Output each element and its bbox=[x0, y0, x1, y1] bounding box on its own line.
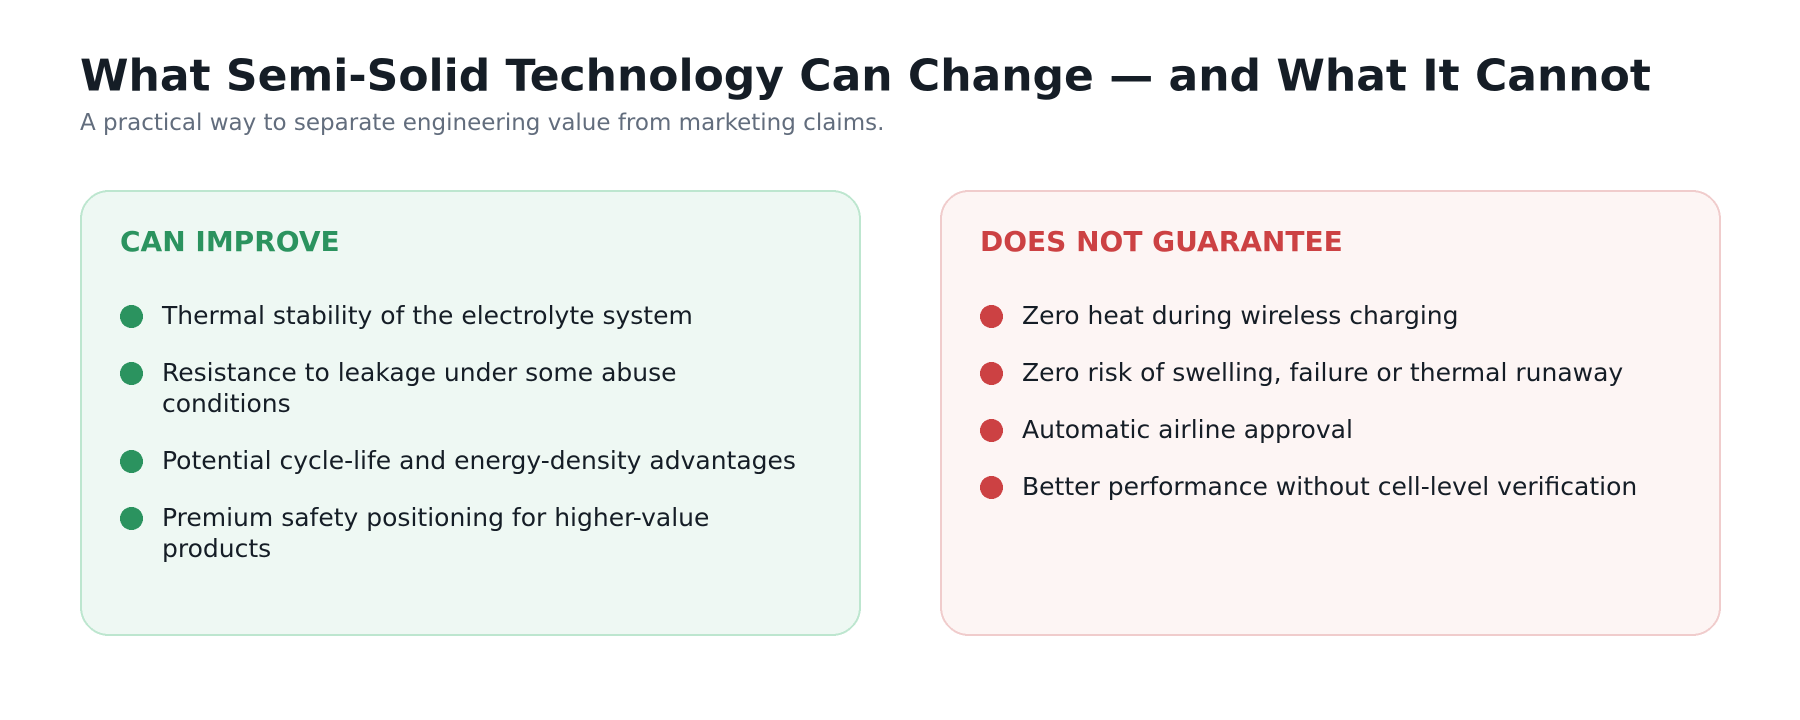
bullet bbox=[980, 419, 1003, 442]
item: Zero heat during wireless charging bbox=[1022, 301, 1458, 330]
bullet bbox=[120, 507, 143, 530]
panel: does not guarantee bbox=[940, 190, 1721, 636]
item: Premium safety positioning for higher-value bbox=[162, 503, 709, 532]
item: Automatic airline approval bbox=[1022, 415, 1353, 444]
item bbox=[162, 358, 677, 418]
item: Thermal stability of the electrolyte system bbox=[162, 301, 693, 330]
bullet bbox=[980, 362, 1003, 385]
bullet bbox=[980, 305, 1003, 328]
item: Resistance to leakage under some abuse bbox=[162, 358, 677, 387]
item: Potential cycle-life and energy-density advantages bbox=[162, 446, 796, 475]
bullet bbox=[120, 362, 143, 385]
item: Zero risk of swelling, failure or thermal runaway bbox=[1022, 358, 1623, 387]
bullet bbox=[120, 450, 143, 473]
item: Better performance without cell-level verification bbox=[1022, 472, 1637, 501]
title: What Semi-Solid Technology Can Change — and What It Cannot bbox=[80, 50, 1651, 102]
bullet bbox=[120, 305, 143, 328]
item: products bbox=[162, 534, 271, 563]
item bbox=[162, 503, 709, 563]
list: does not guarantee bbox=[980, 301, 1637, 501]
subtitle: A practical way to separate engineering value from marketing claims. bbox=[80, 110, 884, 136]
panel: can improve bbox=[80, 190, 861, 636]
heading: does not guarantee: DOES NOT GUARANTEE bbox=[980, 225, 1343, 258]
bullet bbox=[980, 476, 1003, 499]
item: conditions bbox=[162, 389, 291, 418]
list: can improve bbox=[120, 301, 796, 563]
heading: can improve: CAN IMPROVE bbox=[120, 225, 340, 258]
